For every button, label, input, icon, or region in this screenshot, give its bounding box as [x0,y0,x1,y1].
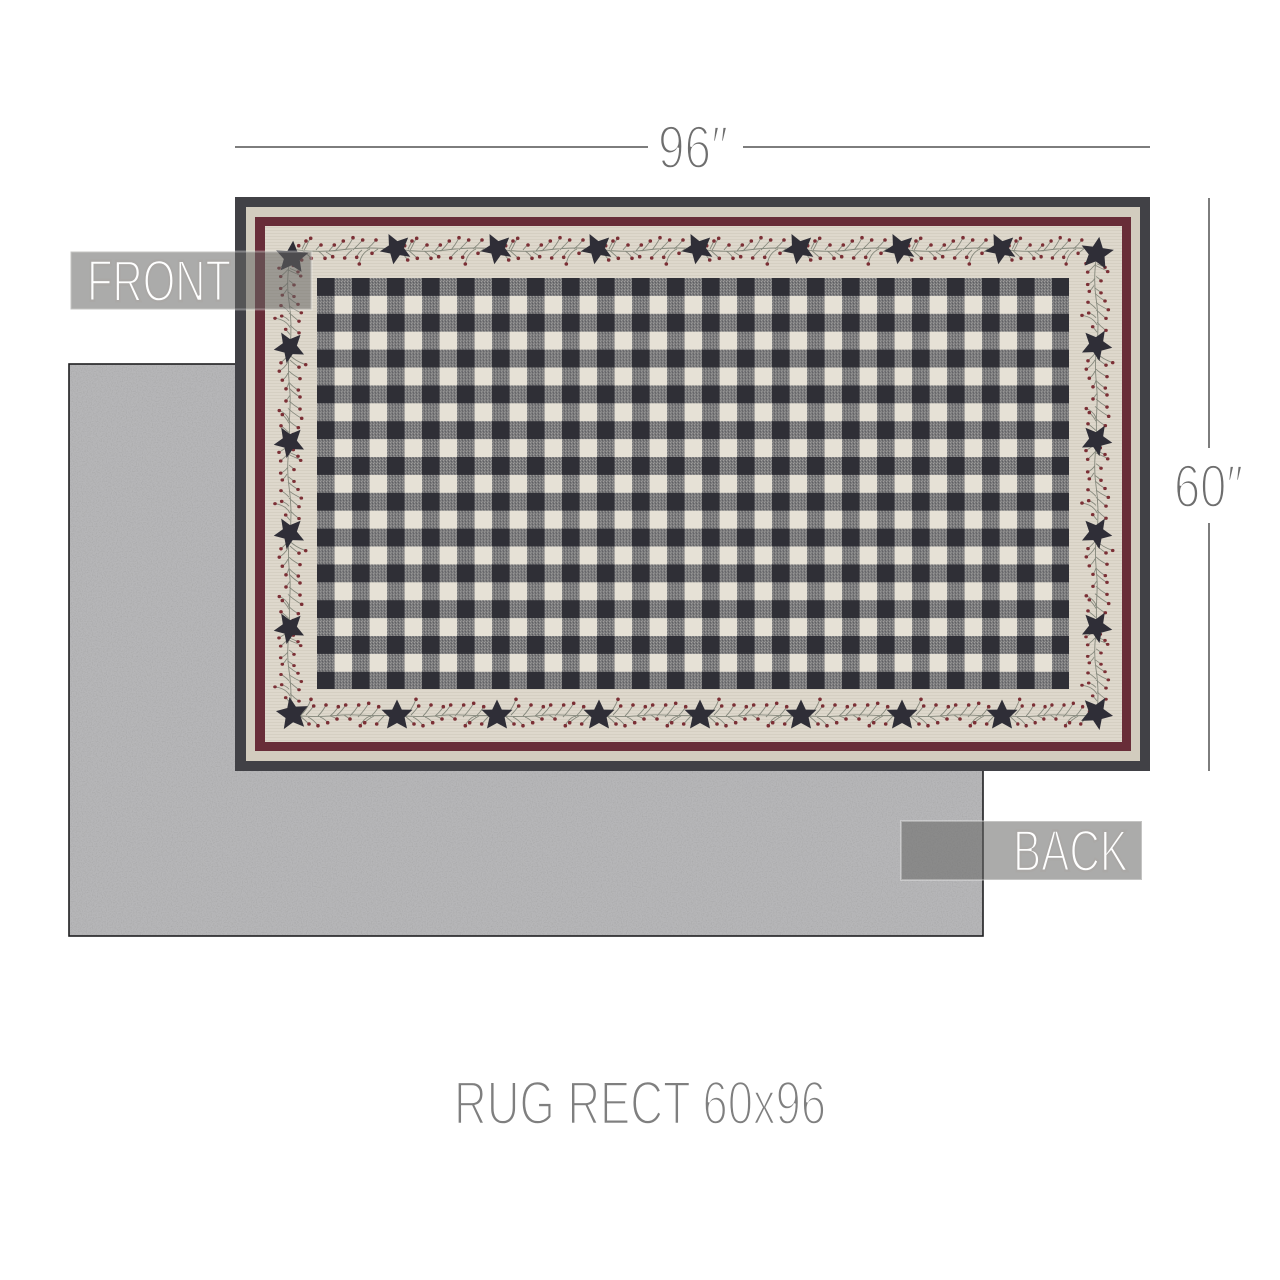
left vine border [273,258,308,715]
dimension: width 96 inches: 96″ [658,114,728,181]
top vine border [290,236,1097,266]
panel: back side of rug [69,364,983,936]
title: RUG RECT 60x96 [454,1069,826,1137]
bottom vine border [292,698,1097,728]
border stars [271,233,1116,732]
dimension: height 60 inches: 60″ [1174,453,1243,520]
label: FRONT: FRONT [87,249,231,314]
label: BACK: BACK [1013,819,1128,884]
right vine border [1080,253,1114,713]
panel: front side of rug [235,197,1150,771]
label: BACK [901,819,1142,884]
gingham check centre field [317,278,1069,689]
